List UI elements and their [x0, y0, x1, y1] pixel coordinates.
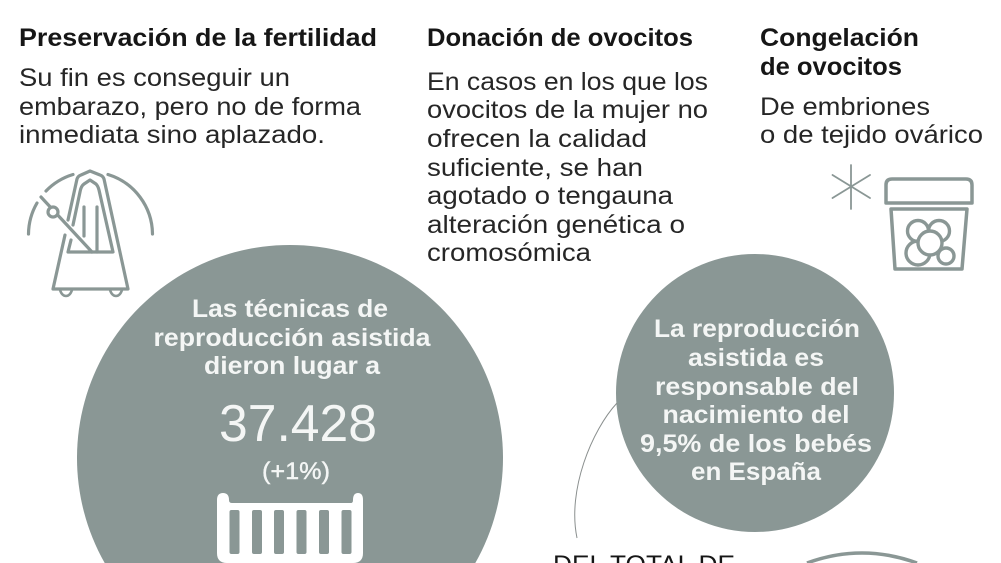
text block: large circle: reproducción asistida	[154, 324, 432, 352]
number: 37.428: 37.428	[219, 395, 377, 453]
number: +1%: (+1%)	[262, 458, 330, 485]
heading: congelación	[760, 24, 919, 81]
text block: congelación: o de tejido ovárico	[760, 121, 983, 149]
icon: metronome	[28, 171, 152, 296]
text block: congelación	[760, 93, 983, 149]
panel: small circle 9,5%	[616, 254, 894, 532]
text block: preservación: inmediata sino aplazado.	[19, 121, 325, 149]
text block: donación: suficiente, se han	[427, 154, 643, 182]
text block: small circle: nacimiento del	[662, 401, 850, 429]
bottom right circle outline	[807, 553, 917, 563]
text block: small circle	[640, 315, 872, 486]
text block: small circle: responsable del	[655, 373, 859, 401]
text block: donación: ofrecen la calidad	[427, 125, 647, 153]
text block: large circle: dieron lugar a	[204, 352, 381, 380]
panel: preservación de la fertilidad	[19, 24, 377, 149]
text block: small circle: asistida es	[688, 344, 824, 372]
text block: small circle: en España	[691, 458, 822, 486]
icon: crib	[217, 493, 363, 563]
text block: small circle: La reproducción	[654, 315, 860, 343]
heading: donación: Donación de ovocitos	[427, 24, 693, 52]
icon: snowflake	[832, 165, 870, 209]
text block: donación: En casos en los que los	[427, 68, 708, 96]
text block: large circle	[154, 295, 432, 380]
panel: congelación de ovocitos	[760, 24, 983, 149]
icon: container with egg cells	[886, 179, 972, 269]
connector arc	[575, 403, 617, 538]
text block: donación: agotado o tengauna	[427, 182, 673, 210]
text block: large circle: Las técnicas de	[192, 295, 388, 323]
circle background	[616, 254, 894, 532]
text block: congelación: De embriones	[760, 93, 930, 121]
text block: preservación	[19, 64, 361, 149]
text block: preservación: embarazo, pero no de forma	[19, 93, 361, 121]
circle background	[77, 245, 503, 563]
heading: preservación: Preservación de la fertilidad	[19, 24, 377, 52]
text block: donación: ovocitos de la mujer no	[427, 96, 708, 124]
panel: large circle births	[77, 245, 503, 563]
text block: donación	[427, 68, 708, 267]
panel: donación de ovocitos	[427, 24, 708, 267]
text block: donación: alteración genética o	[427, 211, 685, 239]
heading: congelación: Congelación	[760, 24, 919, 52]
text block: preservación: Su fin es conseguir un	[19, 64, 290, 92]
text block: donación: cromosómica	[427, 239, 591, 267]
heading: congelación: de ovocitos	[760, 53, 902, 81]
text block: small circle: 9,5% de los bebés	[640, 430, 872, 458]
